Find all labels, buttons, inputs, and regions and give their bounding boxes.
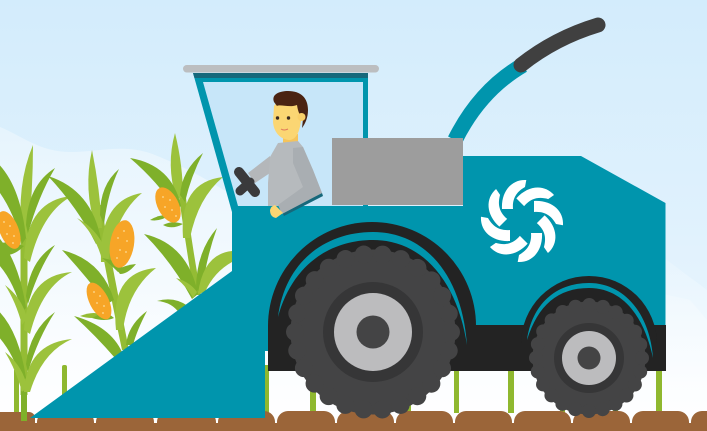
front wheel	[290, 250, 456, 414]
corn cob	[0, 208, 25, 255]
cab roof	[183, 65, 379, 72]
driver	[239, 91, 323, 218]
far arm	[248, 156, 270, 183]
neck	[283, 134, 298, 146]
cab	[183, 65, 379, 212]
ground	[0, 411, 707, 431]
corn cob lower	[80, 279, 117, 323]
undercarriage	[268, 325, 666, 371]
cab frame	[193, 73, 368, 212]
engine box	[332, 138, 463, 205]
rear wheel arch	[521, 276, 657, 358]
front wheel arch	[268, 222, 476, 350]
mouth	[281, 129, 288, 130]
torso	[268, 141, 322, 206]
corn cob upper	[102, 218, 138, 274]
hair	[273, 91, 308, 128]
face	[273, 98, 302, 140]
ear	[298, 113, 306, 121]
logo: swirl	[479, 178, 565, 264]
cab window	[203, 82, 363, 206]
near arm	[278, 147, 322, 214]
background stems	[14, 365, 662, 415]
steering wheel	[239, 172, 255, 192]
chute	[455, 25, 598, 140]
corn plant: right	[130, 133, 232, 314]
background hills	[0, 127, 707, 431]
rear wheel	[532, 302, 646, 414]
arm shadow	[282, 193, 323, 216]
corn cob	[150, 183, 186, 227]
hand	[270, 205, 283, 218]
corn plant: left	[0, 145, 72, 421]
machine body	[30, 156, 666, 418]
eyes	[276, 116, 290, 120]
corn plant: middle	[48, 150, 156, 358]
cab roof shade	[193, 73, 368, 78]
